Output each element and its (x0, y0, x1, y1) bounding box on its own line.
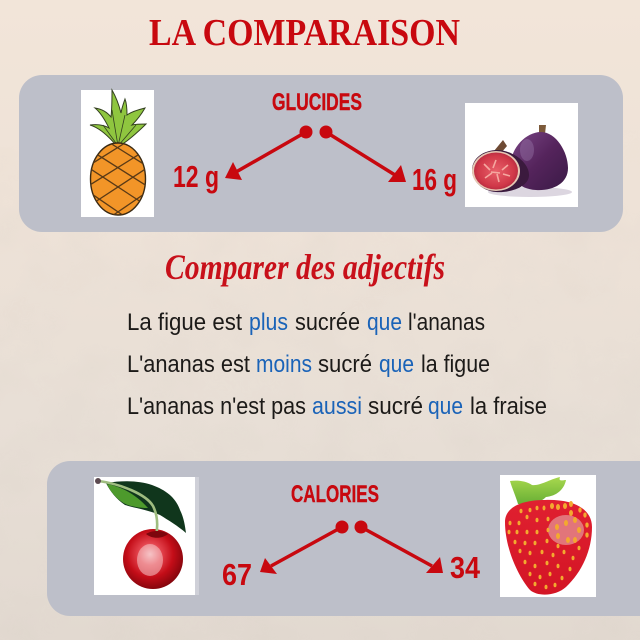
heading: calories: CALORIES (291, 481, 379, 508)
value: 67: 67 (222, 557, 252, 592)
image: cherry (94, 477, 199, 595)
arrow: left glucides (225, 126, 312, 180)
sentence 1: l'ananas (408, 309, 485, 336)
value: 12 g: 12 g (173, 159, 219, 194)
sentence 3: que (428, 393, 463, 420)
sentence 2: que (379, 351, 414, 378)
sentence 2: sucré (318, 351, 372, 378)
arrow: left calories (260, 520, 348, 574)
panel: calories (47, 461, 640, 616)
image: strawberry (500, 475, 596, 597)
sentence 3: aussi (312, 393, 362, 420)
arrow: right glucides (320, 126, 406, 182)
heading: glucides: GLUCIDES (272, 89, 362, 116)
arrow: right calories (354, 520, 443, 573)
value: 34: 34 (450, 550, 481, 585)
panel: glucides (19, 75, 623, 232)
sentence 1: que (367, 309, 402, 336)
sentence 1: plus (249, 309, 288, 336)
sentence 3: sucré (368, 393, 423, 420)
title: LA COMPARAISON (149, 12, 460, 54)
image: figs (465, 103, 578, 207)
sentence 3: L'ananas n'est pas (127, 393, 306, 420)
sentence 2: la figue (421, 351, 490, 378)
sentence 1: sucrée (295, 309, 360, 336)
sentence 2: L'ananas est (127, 351, 250, 378)
sentence 1: La figue est (127, 309, 242, 336)
value: 16 g: 16 g (412, 162, 457, 197)
sentence 2: moins (256, 351, 312, 378)
heading: comparer des adjectifs: Comparer des adjectifs (165, 247, 445, 287)
image: pineapple (81, 90, 154, 217)
sentence 3: la fraise (470, 393, 547, 420)
